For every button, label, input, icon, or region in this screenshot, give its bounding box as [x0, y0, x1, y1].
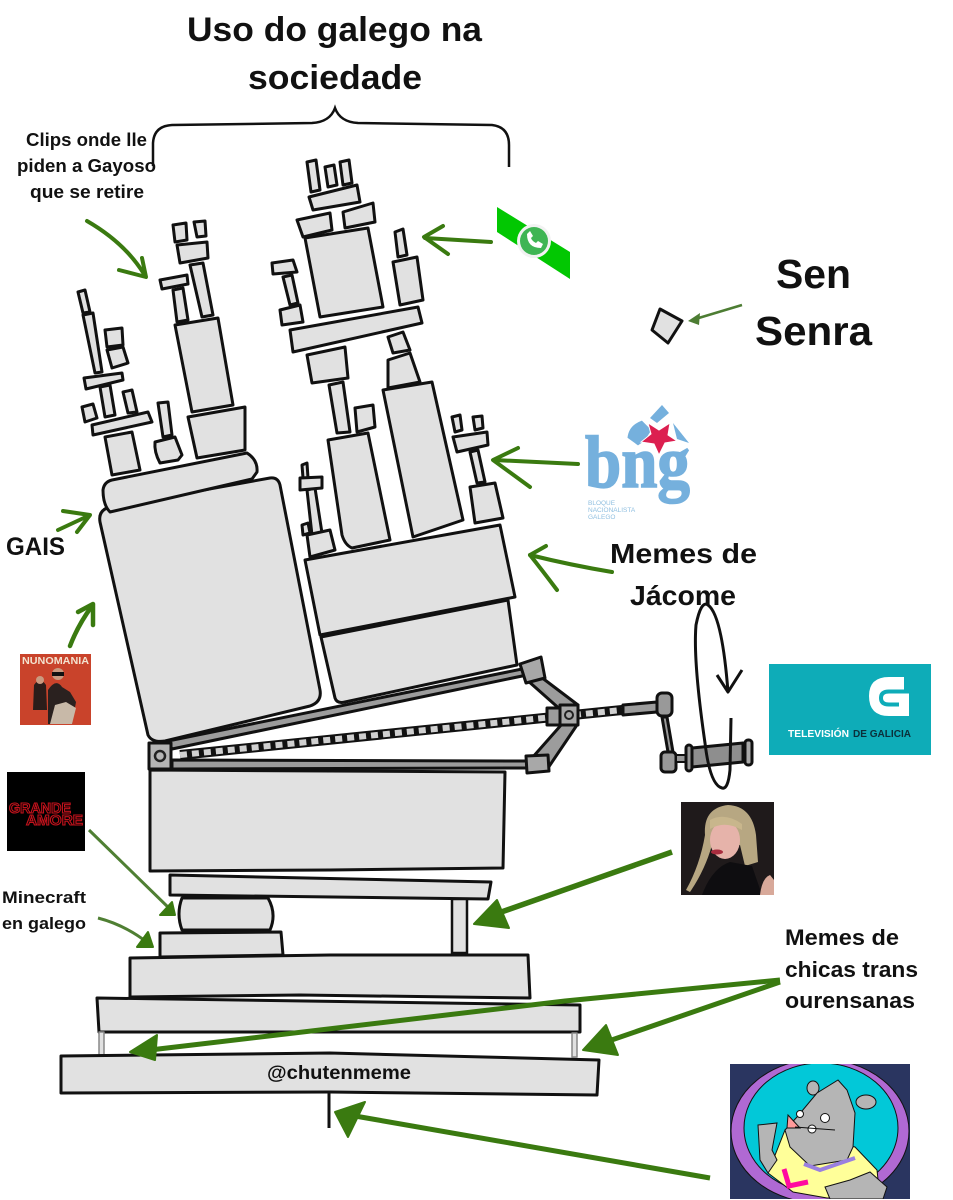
- right tower: [272, 160, 517, 702]
- logo: BNG: BLOQUE: [588, 500, 616, 507]
- lower body block: [150, 770, 505, 871]
- arrow: rat to stem: [335, 1102, 710, 1178]
- label: Clips: que se retire: [30, 182, 144, 202]
- arrow: Jácome: [530, 546, 612, 590]
- logo: Televisión de Galicia: [769, 664, 931, 755]
- label: Memes de Jácome: [610, 538, 757, 611]
- image: portrait photo: [681, 802, 774, 895]
- label: GAIS: GAIS: [6, 533, 65, 561]
- arrow: trans memes, short: [583, 982, 780, 1055]
- label: Minecraft en galego: [2, 888, 86, 933]
- arrow: WhatsApp to tower: [424, 226, 491, 254]
- label: Memes de Jácome: Memes de: [610, 538, 757, 569]
- label: Memes de Jácome: Jácome: [630, 580, 736, 611]
- rotation arrow: [695, 604, 742, 788]
- image: Grande Amore logo: AMORE: [26, 812, 83, 829]
- image: Grande Amore logo: GRANDE: [9, 800, 71, 817]
- arrow: Clips to tower: [87, 221, 146, 277]
- arrow: GAIS: [58, 511, 90, 532]
- label: Sen Senra: Sen: [776, 251, 851, 297]
- image: Grande Amore logo: [7, 772, 85, 851]
- logo: BNG: GALEGO: [588, 514, 615, 521]
- left tower: [78, 221, 320, 741]
- label: Memes de chicas trans ourensanas: ourensanas: [785, 988, 915, 1013]
- image: Nunomania cover: [20, 654, 91, 725]
- label: Sen Senra: Senra: [755, 308, 873, 354]
- base stack: [61, 875, 599, 1128]
- icon: WhatsApp: [497, 207, 570, 279]
- label: Minecraft en galego: en galego: [2, 914, 86, 933]
- logo: Televisión de Galicia: TELEVISIÓN: [788, 727, 849, 740]
- label: Clips: Clips onde lle: [26, 130, 147, 150]
- label: Minecraft en galego: Minecraft: [2, 888, 86, 907]
- title: sociedade: [248, 59, 422, 97]
- image: Nunomania cover: NUNOMANIA: [22, 655, 89, 667]
- label: @chutenmeme: @chutenmeme: [267, 1063, 411, 1084]
- label: Memes de chicas trans ourensanas: chicas trans: [785, 957, 918, 982]
- label: Sen Senra: [755, 251, 873, 354]
- label: Memes de chicas trans ourensanas: Memes de: [785, 925, 899, 950]
- jack mechanism: [149, 657, 752, 773]
- logo: BNG: bng: [585, 422, 690, 504]
- label: Clips: piden a Gayoso: [17, 156, 156, 176]
- arrow: portrait to column: [474, 852, 672, 928]
- logo: BNG: [585, 405, 690, 521]
- title: Uso do galego na: [187, 11, 483, 49]
- title: [187, 11, 483, 97]
- arrow: Grande Amore: [89, 830, 175, 915]
- machine illustration: [61, 160, 752, 1128]
- arrow: Nunomania: [70, 604, 93, 646]
- arrow: BNG to tower: [493, 448, 578, 487]
- lone block: Sen Senra: [652, 309, 682, 343]
- arrow: Sen Senra: [688, 305, 742, 325]
- label: Memes de chicas trans ourensanas: [785, 925, 918, 1013]
- arrow: Minecraft: [98, 918, 153, 947]
- logo: BNG: NACIONALISTA: [588, 507, 636, 514]
- arrow: trans memes, long: [130, 980, 780, 1060]
- curly brace: [153, 108, 509, 167]
- label: Clips: [17, 130, 156, 202]
- image: cartoon rat: [730, 1064, 910, 1199]
- logo: Televisión de Galicia: DE GALICIA: [853, 729, 911, 740]
